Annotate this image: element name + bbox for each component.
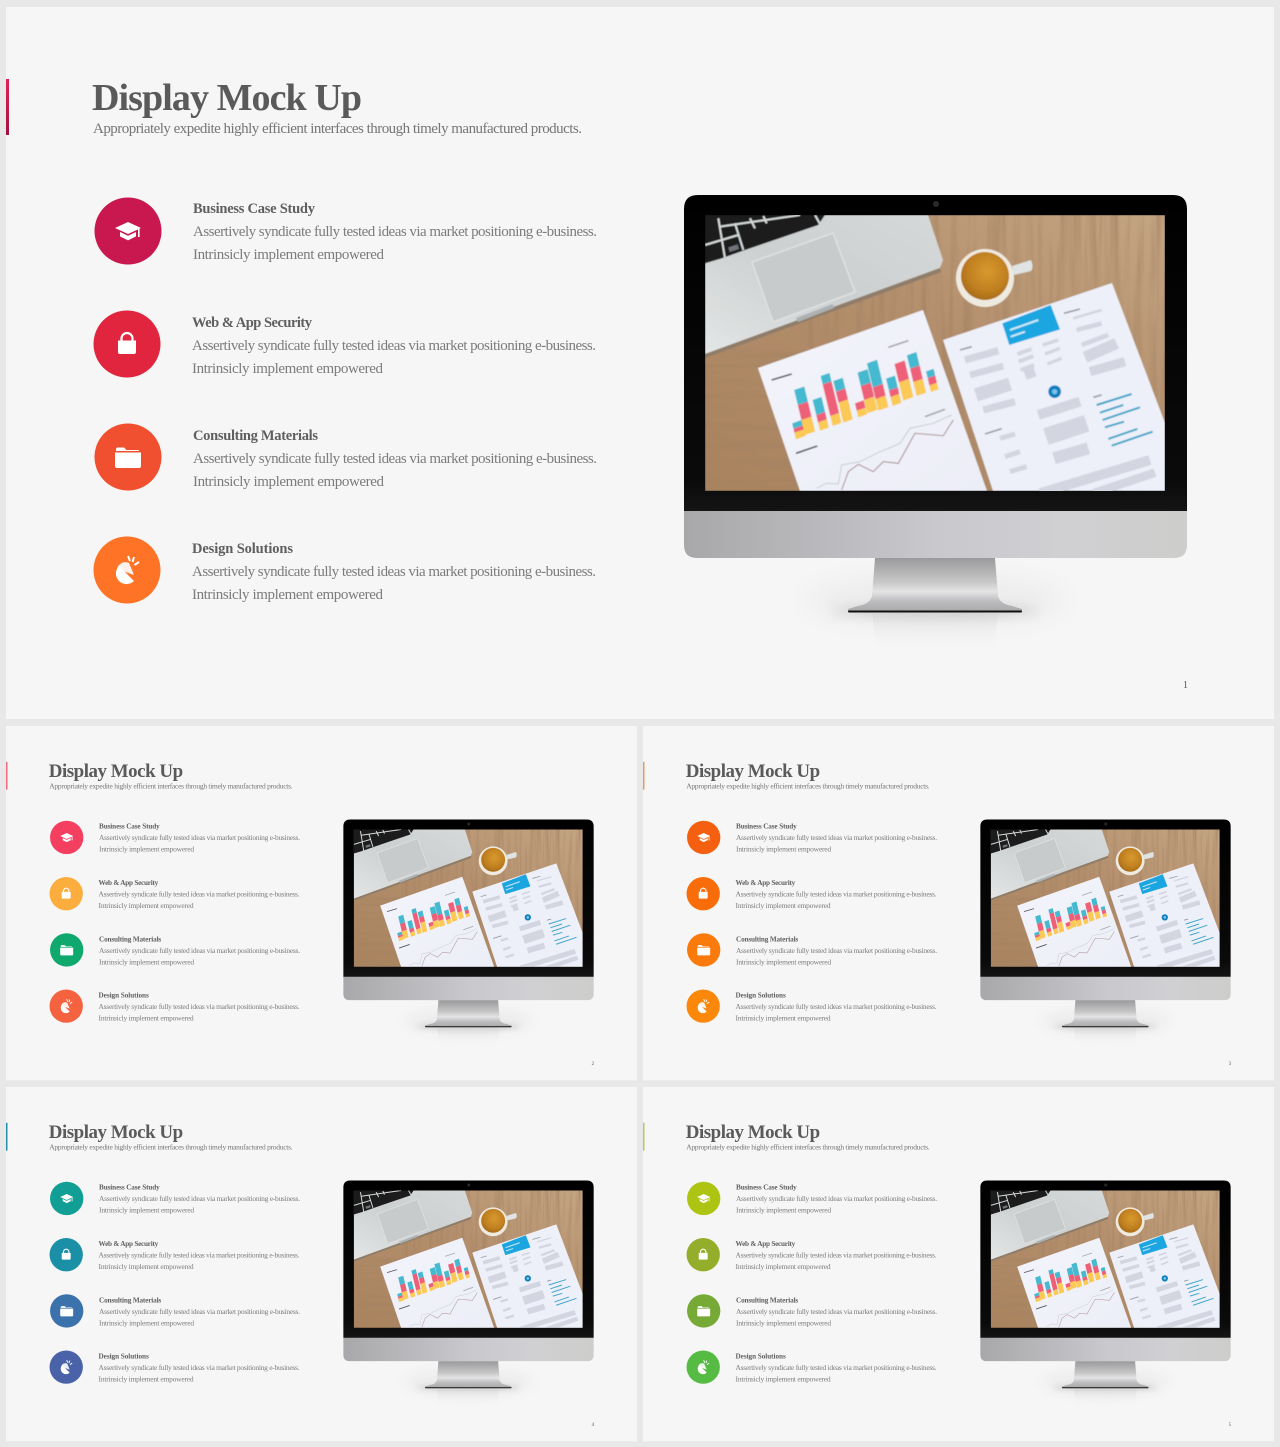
item: consulting materials: Intrinsicly implement empowered	[736, 1318, 831, 1327]
item: web and app security: Intrinsicly implement empowered	[736, 1262, 831, 1271]
item: consulting materials	[687, 933, 937, 967]
page number: 1	[1183, 680, 1188, 691]
item: design solutions	[50, 989, 300, 1023]
item: design solutions	[687, 1350, 937, 1384]
item: web and app security: Web & App Security	[736, 879, 796, 887]
item: business case study: Assertively syndicate fully tested ideas via market positioning e-business.	[193, 224, 597, 240]
item: business case study	[687, 1182, 937, 1215]
monitor mockup	[684, 195, 1187, 650]
item: consulting materials: Intrinsicly implement empowered	[99, 1318, 194, 1327]
slide 2 background	[6, 726, 637, 1080]
item: design solutions: Assertively syndicate fully tested ideas via market positioning e-business.	[99, 1363, 300, 1372]
slide 3 background	[643, 726, 1274, 1080]
title: Display Mock Up	[92, 77, 362, 119]
item: consulting materials: Assertively syndicate fully tested ideas via market positioning e-business.	[736, 946, 937, 955]
item: business case study	[94, 198, 597, 264]
item: design solutions: Assertively syndicate fully tested ideas via market positioning e-business.	[192, 564, 596, 580]
item: web and app security: Web & App Security	[736, 1240, 796, 1248]
subtitle: Appropriately expedite highly efficient interfaces through timely manufactured products.	[686, 1143, 930, 1152]
accent bar	[643, 1123, 644, 1151]
item: web and app security: Web & App Security	[99, 879, 159, 887]
title: Display Mock Up	[686, 761, 820, 782]
item: consulting materials: Consulting Materials	[736, 1296, 798, 1304]
item: web and app security: Assertively syndicate fully tested ideas via market positioning e-business.	[99, 1251, 300, 1260]
item: design solutions: Intrinsicly implement empowered	[192, 587, 384, 603]
item: web and app security	[94, 310, 596, 378]
slide 4 background	[6, 1087, 637, 1441]
item: design solutions	[50, 1350, 300, 1384]
item: business case study: Intrinsicly implement empowered	[99, 1205, 194, 1214]
item: design solutions: Assertively syndicate fully tested ideas via market positioning e-business.	[99, 1002, 300, 1011]
item: consulting materials: Consulting Materials	[736, 935, 798, 943]
item: consulting materials: Assertively syndicate fully tested ideas via market positioning e-business.	[193, 451, 597, 467]
item: web and app security	[687, 1238, 937, 1271]
item: web and app security: Web & App Security	[99, 1240, 159, 1248]
slide 5 background	[643, 1087, 1274, 1441]
accent bar	[6, 762, 7, 790]
item: web and app security: Assertively syndicate fully tested ideas via market positioning e-business.	[736, 890, 937, 899]
item: business case study	[50, 1182, 300, 1215]
item: design solutions: Design Solutions	[99, 992, 149, 1000]
item: design solutions: Assertively syndicate fully tested ideas via market positioning e-business.	[736, 1002, 937, 1011]
item: consulting materials: Consulting Materials	[99, 1296, 161, 1304]
subtitle: Appropriately expedite highly efficient interfaces through timely manufactured products.	[49, 782, 293, 791]
item: web and app security: Intrinsicly implement empowered	[736, 901, 831, 910]
accent bar	[6, 1123, 7, 1151]
title: Display Mock Up	[49, 761, 183, 782]
subtitle: Appropriately expedite highly efficient interfaces through timely manufactured products.	[49, 1143, 293, 1152]
item: consulting materials: Intrinsicly implement empowered	[193, 474, 384, 490]
monitor mockup	[980, 1181, 1231, 1407]
item: business case study: Assertively syndicate fully tested ideas via market positioning e-business.	[736, 1194, 937, 1203]
slide 1: crimson	[6, 7, 1274, 719]
item: web and app security: Web & App Security	[192, 315, 313, 331]
item: design solutions	[687, 989, 937, 1023]
monitor mockup	[343, 1181, 594, 1407]
slide 1 background	[6, 7, 1274, 719]
item: web and app security: Assertively syndicate fully tested ideas via market positioning e-business.	[99, 890, 300, 899]
item: business case study: Intrinsicly implement empowered	[736, 1205, 831, 1214]
item: consulting materials: Intrinsicly implement empowered	[99, 957, 194, 966]
item: web and app security: Intrinsicly implement empowered	[192, 361, 384, 377]
item: business case study: Assertively syndicate fully tested ideas via market positioning e-business.	[736, 833, 937, 842]
item: design solutions: Assertively syndicate fully tested ideas via market positioning e-business.	[736, 1363, 937, 1372]
item: design solutions: Intrinsicly implement empowered	[736, 1014, 831, 1023]
subtitle: Appropriately expedite highly efficient interfaces through timely manufactured products.	[686, 782, 930, 791]
item: business case study: Assertively syndicate fully tested ideas via market positioning e-business.	[99, 1194, 300, 1203]
item: web and app security: Assertively syndicate fully tested ideas via market positioning e-business.	[192, 338, 596, 354]
item: business case study: Business Case Study	[99, 1183, 160, 1191]
item: consulting materials: Intrinsicly implement empowered	[736, 957, 831, 966]
subtitle: Appropriately expedite highly efficient interfaces through timely manufactured products.	[93, 121, 582, 137]
item: business case study: Assertively syndicate fully tested ideas via market positioning e-business.	[99, 833, 300, 842]
item: business case study: Intrinsicly implement empowered	[99, 844, 194, 853]
item: business case study	[50, 821, 300, 854]
item: business case study: Business Case Study	[736, 822, 797, 830]
item: design solutions: Intrinsicly implement empowered	[99, 1375, 194, 1384]
slide 2: warm palette	[6, 726, 637, 1080]
item: consulting materials	[50, 933, 300, 967]
title: Display Mock Up	[686, 1122, 820, 1143]
item: web and app security: Assertively syndicate fully tested ideas via market positioning e-business.	[736, 1251, 937, 1260]
item: business case study: Intrinsicly implement empowered	[736, 844, 831, 853]
item: consulting materials: Consulting Materials	[193, 428, 318, 444]
title: Display Mock Up	[49, 1122, 183, 1143]
item: consulting materials: Assertively syndicate fully tested ideas via market positioning e-business.	[736, 1307, 937, 1316]
monitor mockup	[343, 820, 594, 1046]
item: business case study: Business Case Study	[99, 822, 160, 830]
item: consulting materials: Consulting Materials	[99, 935, 161, 943]
slide 5: green palette	[643, 1087, 1274, 1441]
item: design solutions: Design Solutions	[736, 992, 786, 1000]
page number: 3	[1229, 1062, 1232, 1067]
item: consulting materials: Assertively syndicate fully tested ideas via market positioning e-business.	[99, 1307, 300, 1316]
item: web and app security	[50, 877, 300, 910]
item: consulting materials	[94, 424, 597, 490]
item: design solutions	[94, 536, 596, 604]
accent bar	[643, 762, 644, 790]
item: web and app security	[687, 877, 937, 910]
item: web and app security: Intrinsicly implement empowered	[99, 901, 194, 910]
item: consulting materials	[687, 1294, 937, 1328]
item: design solutions: Design Solutions	[99, 1353, 149, 1361]
slide 3: orange palette	[643, 726, 1274, 1080]
item: business case study	[687, 821, 937, 854]
item: design solutions: Design Solutions	[192, 541, 293, 557]
page number: 5	[1229, 1423, 1232, 1428]
item: consulting materials	[50, 1294, 300, 1328]
item: design solutions: Intrinsicly implement empowered	[736, 1375, 831, 1384]
item: web and app security: Intrinsicly implement empowered	[99, 1262, 194, 1271]
accent bar	[6, 79, 9, 135]
item: design solutions: Design Solutions	[736, 1353, 786, 1361]
item: consulting materials: Assertively syndicate fully tested ideas via market positioning e-business.	[99, 946, 300, 955]
item: business case study: Business Case Study	[736, 1183, 797, 1191]
slide 4: teal and blue palette	[6, 1087, 637, 1441]
page number: 2	[592, 1062, 595, 1067]
page number: 4	[592, 1423, 595, 1428]
item: business case study: Intrinsicly implement empowered	[193, 247, 384, 263]
monitor mockup	[980, 820, 1231, 1046]
item: business case study: Business Case Study	[193, 201, 316, 217]
item: design solutions: Intrinsicly implement empowered	[99, 1014, 194, 1023]
item: web and app security	[50, 1238, 300, 1271]
